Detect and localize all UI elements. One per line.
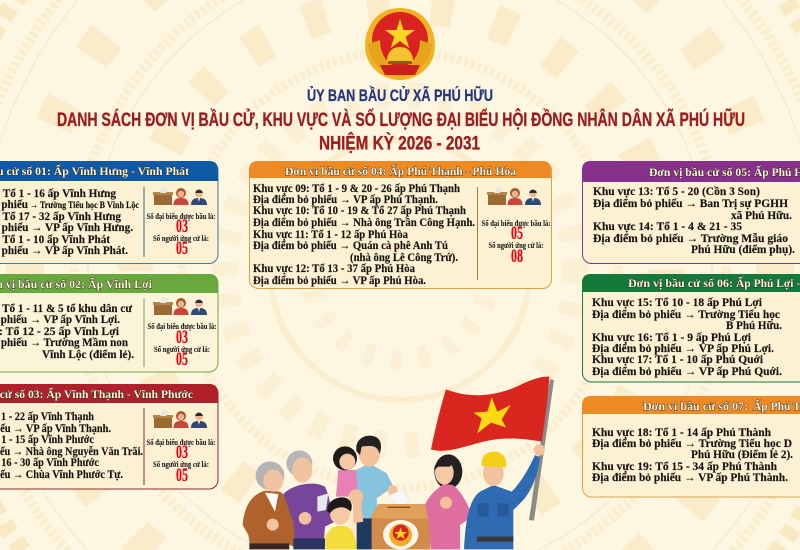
header: unit 07 <box>643 398 800 413</box>
stats: unit 02: 05 <box>176 349 188 370</box>
stats: unit 02: 03 <box>176 327 188 348</box>
header: unit 05 <box>649 164 800 179</box>
header: unit 07: Đơn vị bầu cử số 07: <box>643 400 748 413</box>
person: little girl <box>333 446 363 523</box>
text block: unit 05 areas <box>593 185 795 256</box>
title: term years: NHIỆM KỲ 2026 - 2031 <box>319 130 480 154</box>
stats: unit 02: Số người ứng cử là: <box>154 345 210 354</box>
text block: unit 04 areas <box>253 182 475 287</box>
text block: unit 05 areas: Phú Hữu (điểm phụ). <box>691 243 795 256</box>
icon: ballot box <box>370 504 432 549</box>
person: father <box>355 436 397 549</box>
stats: unit 01 <box>146 212 216 259</box>
text block: unit 06 areas: Địa điểm bỏ phiếu → Trường Tiểu học <box>592 308 780 321</box>
text block: unit 04 areas: Khu vực 10: Tổ 10 - 19 & Tổ 27 ấp Phú Thạnh <box>253 204 467 217</box>
text block: unit 01 areas: → Trường Tiểu học B Vĩnh Lộc <box>30 200 139 211</box>
stats: unit 04: 05 <box>511 223 523 244</box>
text block: unit 07 areas: Phú Hữu (Điểm lẻ 2). <box>691 448 793 461</box>
stats: unit 03: Số đại biểu được bầu là: <box>146 438 216 447</box>
icon: ballot box and candidates <box>153 187 207 205</box>
stats: unit 02 <box>148 322 216 370</box>
text block: unit 05 areas: Khu vực 14: Tổ 1 - 4 & 21 - 35 <box>593 220 742 233</box>
text block: unit 04 areas: (nhà ông Lê Công Trứ). <box>350 252 458 264</box>
panel: unit 04 <box>249 161 552 288</box>
illustration: family voting with flag <box>243 377 554 549</box>
stats: unit 02: Số đại biểu được bầu là: <box>148 322 216 331</box>
person: grandmother <box>243 461 301 549</box>
stats: unit 04: Số người ứng cử là: <box>488 241 544 250</box>
text block: unit 02 areas: Vĩnh Lộc (điểm lẻ). <box>42 348 134 361</box>
person: woman in ao dai <box>425 454 472 549</box>
panel: unit 01 <box>0 161 218 264</box>
stats: unit 01: Số đại biểu được bầu là: <box>146 212 216 221</box>
stats: unit 01: 05 <box>176 238 188 259</box>
text block: unit 06 areas: B Phú Hữu. <box>726 320 782 332</box>
text block: unit 07 areas: Địa điểm bỏ phiếu → VP ấp Phú Thành. <box>592 471 788 484</box>
panel: unit 05 <box>582 161 800 264</box>
text block: unit 05 areas: Địa điểm bỏ phiếu → Ban Trị sự PGHH <box>593 197 788 210</box>
text block: unit 04 areas: Khu vực 09: Tổ 1 - 9 & 20 - 26 ấp Phú Thạnh <box>253 182 461 195</box>
text block: unit 04 areas: Khu vực 12: Tổ 13 - 37 ấp Phú Hòa <box>253 262 415 275</box>
text block: unit 07 areas: Địa điểm bỏ phiếu → Trường Tiểu học D <box>592 437 792 450</box>
text block: unit 06 areas: Khu vực 16: Tổ 1 - 9 ấp Phú Lợi <box>592 331 752 344</box>
person: boy <box>325 497 357 549</box>
text block: unit 03 areas <box>0 410 143 481</box>
text block: unit 02 areas <box>0 302 134 361</box>
icon: ballot paper <box>387 489 410 509</box>
text block: unit 04 areas: Địa điểm bỏ phiếu → Nhà ông Trần Công Hạnh. <box>253 216 475 229</box>
text block: unit 06 areas: Địa điểm bỏ phiếu → VP ấp Phú Lợi. <box>592 342 774 355</box>
icon: national emblem <box>365 8 435 80</box>
panel: unit 07 <box>582 396 800 497</box>
stats: unit 04: Số đại biểu được bầu là: <box>482 219 550 228</box>
header: unit 05: Đơn vị bầu cử số 05: <box>649 166 751 179</box>
panel: unit 02 <box>0 274 218 372</box>
stats: unit 01: 03 <box>176 216 188 237</box>
stats: unit 04 <box>482 219 550 267</box>
text block: unit 07 areas <box>592 426 793 484</box>
stats: unit 03: 03 <box>176 442 188 463</box>
text block: unit 06 areas: Địa điểm bỏ phiếu → VP ấp Phú Quới. <box>592 365 782 378</box>
icon: flag <box>431 377 554 521</box>
text block: unit 06 areas: Khu vực 15: Tổ 10 - 18 ấp Phú Lợi <box>592 296 763 309</box>
text block: unit 06 areas <box>592 296 782 378</box>
header: unit 06: Đơn vị bầu cử số 06: <box>628 277 733 290</box>
icon: ballot box and candidates <box>153 410 207 428</box>
text block: unit 04 areas: Địa điểm bỏ phiếu → Quán cà phê Anh Tú <box>253 239 449 252</box>
text block: unit 06 areas: Khu vực 17: Tổ 1 - 10 ấp Phú Quới <box>592 353 764 366</box>
icon: ballot box and candidates <box>487 187 541 205</box>
text block: unit 07 areas: Khu vực 19: Tổ 15 - 34 ấp Phú Thành <box>592 460 778 473</box>
stats: unit 01: Số người ứng cử là: <box>153 234 209 243</box>
person: worker <box>464 444 545 549</box>
text block: unit 05 areas: Khu vực 13: Tổ 5 - 20 (Cồn 3 Son) <box>593 185 760 198</box>
text block: unit 07 areas: Khu vực 18: Tổ 1 - 14 ấp Phú Thành <box>592 426 772 439</box>
text block: unit 04 areas: Địa điểm bỏ phiếu → VP ấp Phú Thạnh. <box>253 193 438 206</box>
person: grandfather <box>283 450 335 549</box>
header: unit 04: Đơn vị bầu cử số 04: Ấp Phú Thạnh - Phú Hòa <box>285 163 516 178</box>
text block: unit 04 areas: Địa điểm bỏ phiếu → VP ấp Phú Hòa. <box>253 274 426 287</box>
text block: unit 04 areas: Khu vực 11: Tổ 1 - 12 ấp Phú Hòa <box>253 228 408 241</box>
stats: unit 04: 08 <box>511 246 523 267</box>
header: unit 06 <box>628 275 800 290</box>
text block: unit 05 areas: xã Phú Hữu. <box>731 210 792 222</box>
icon: ballot box and candidates <box>153 297 207 315</box>
text block: unit 01 areas <box>0 187 139 257</box>
text block: unit 05 areas: Địa điểm bỏ phiếu → Trường Mẫu giáo <box>593 232 788 245</box>
panel: unit 03 <box>0 384 218 489</box>
stats: unit 03: 05 <box>176 465 188 486</box>
stats: unit 03 <box>146 438 216 486</box>
stats: unit 03: Số người ứng cử là: <box>153 460 209 469</box>
subtitle: commission name: ỦY BAN BẦU CỬ XÃ PHÚ HỮU <box>307 85 493 105</box>
panel: unit 06 <box>582 274 800 382</box>
